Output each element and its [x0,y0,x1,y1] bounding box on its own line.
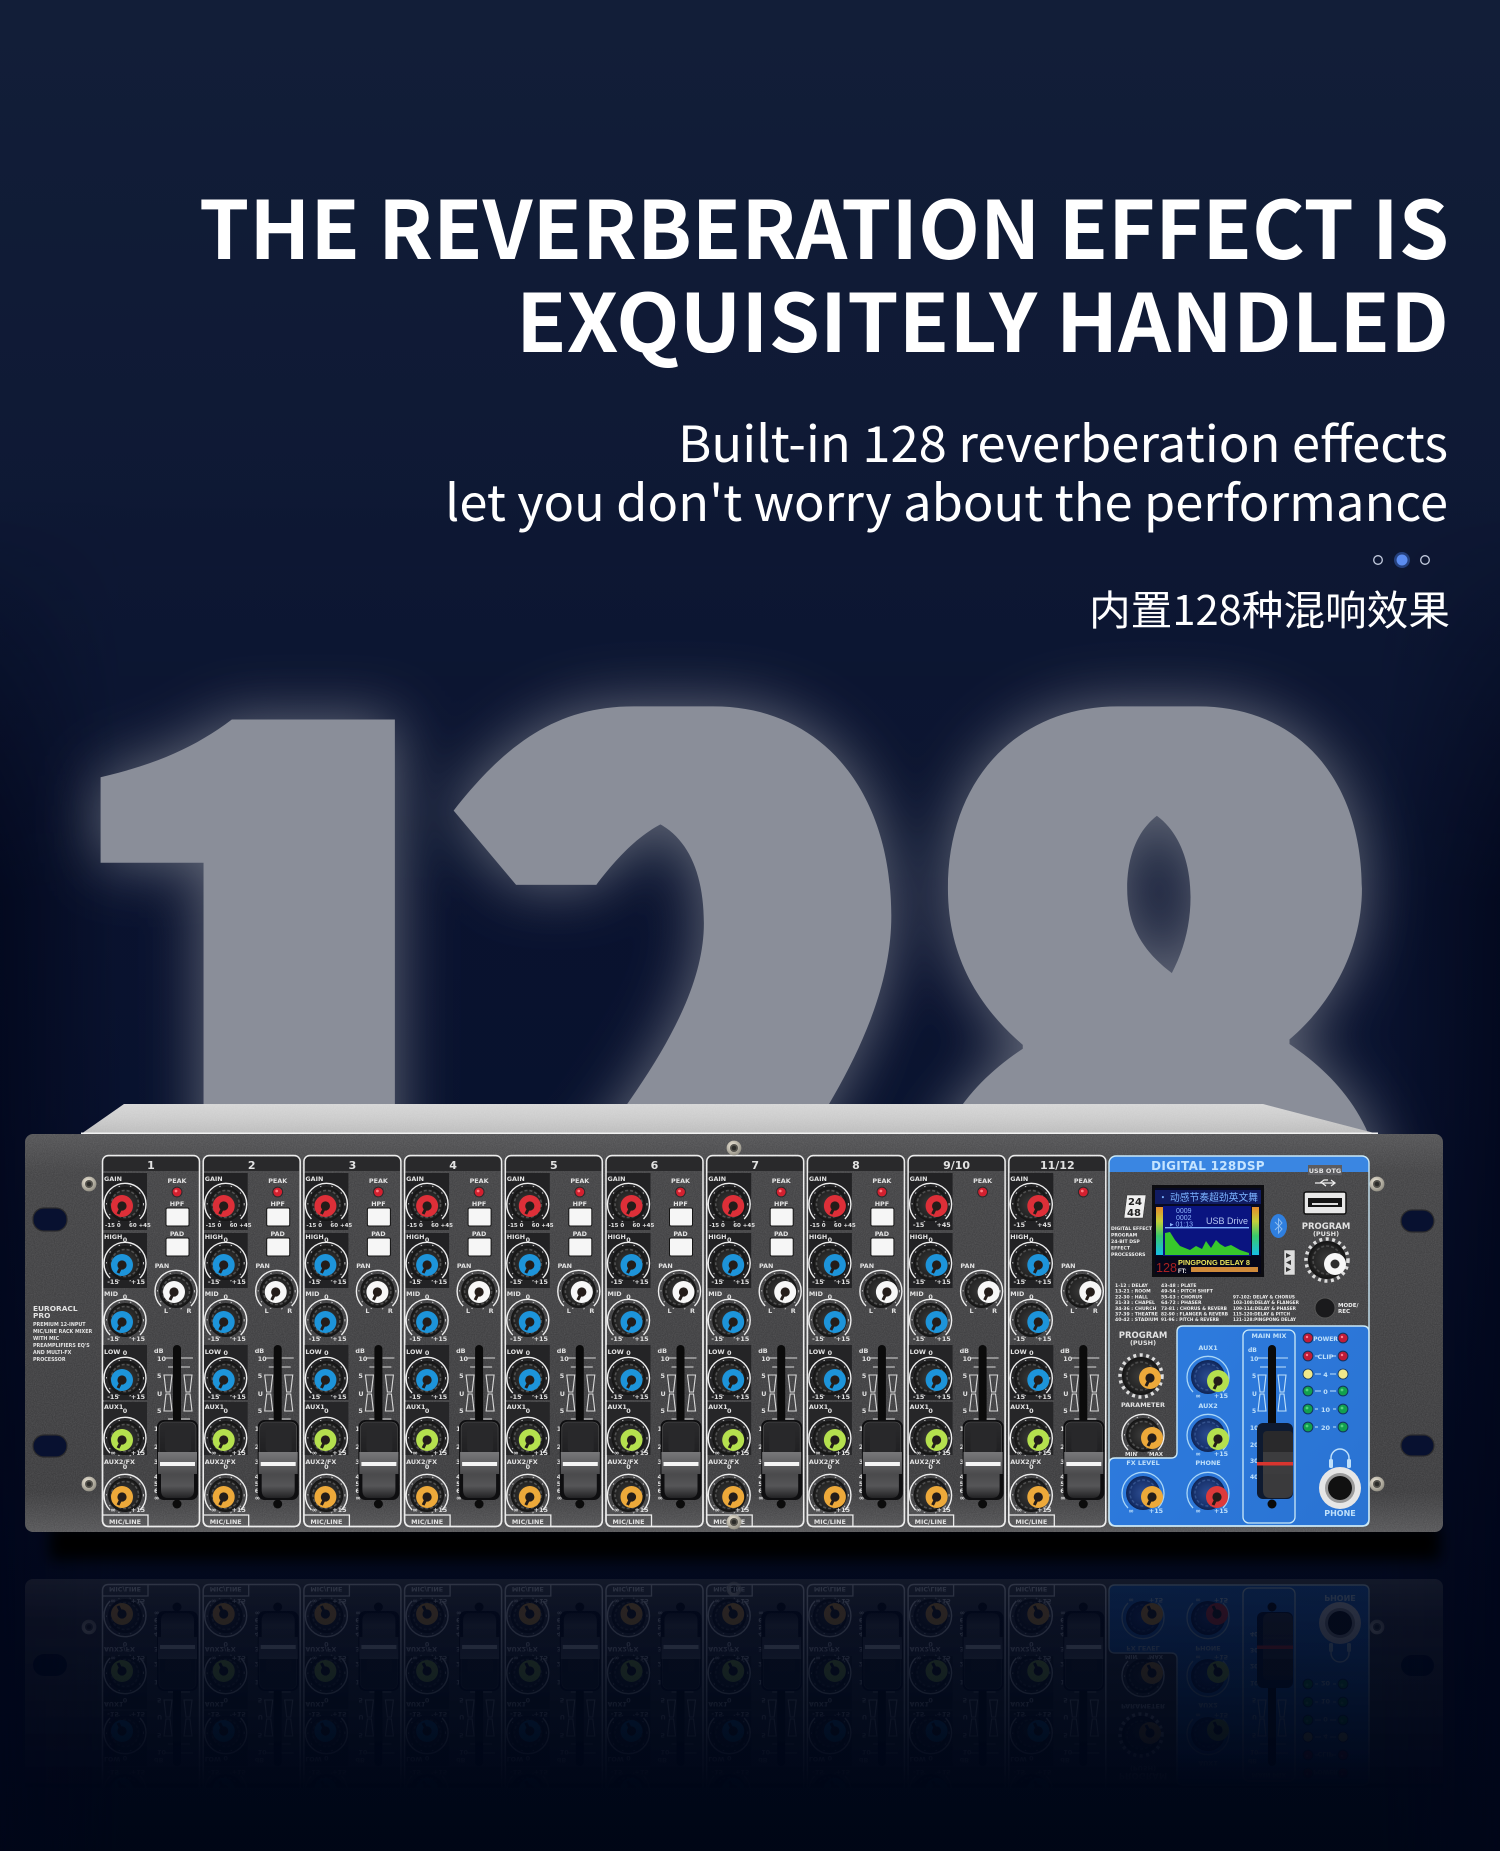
channel 2 [203,1156,300,1526]
transport buttons [1284,1250,1295,1275]
effects program list: 55-63 : CHORUS [1161,1294,1202,1300]
effects program list: 121-128:PINGPONG DELAY [1233,1317,1297,1323]
rack mixer unit [25,1134,1443,1532]
effects program list: 13-21 : ROOM [1115,1289,1151,1295]
LCD screen: FT: [1178,1269,1187,1275]
24/48 logo and description: 48 [1127,1208,1141,1219]
effects program list: 37-39 : THEATRE [1115,1312,1158,1318]
USB OTG port: USB OTG [1309,1167,1341,1175]
brand text: WITH MIC [33,1336,60,1342]
effects program list: 22-30 : HALL [1115,1294,1148,1300]
effects program list: 1-12 : DELAY [1115,1283,1149,1289]
channel 8: 8 [852,1159,860,1172]
channel 3: 3 [349,1159,356,1172]
panel: digital DSP section [1109,1156,1369,1526]
brand text: AND MULTI-FX [33,1350,72,1356]
panel: blue main mix section [1109,1326,1369,1526]
MODE/REC button: REC [1338,1309,1350,1315]
24/48 logo and description: 24-BIT DSP [1111,1239,1140,1245]
pagination dots [1374,552,1429,568]
PROGRAM knob [1302,1222,1350,1281]
channel 5: 5 [550,1159,558,1172]
channel 1 [102,1156,200,1526]
MODE/REC button [1315,1298,1359,1318]
subtitle: Built-in 128 reverberation effects [678,405,1448,477]
effects program list: 82-90 : FLANGER & REVERB [1161,1312,1228,1318]
channel 1: 1 [147,1159,155,1172]
effects program list: 91-96 : PITCH & REVERB [1161,1317,1219,1323]
effects program list [1115,1283,1299,1323]
channel 8 [807,1156,904,1526]
LCD screen [1152,1185,1264,1277]
LCD screen: ▸ 01:13 [1170,1222,1193,1228]
LCD screen: 128 [1156,1260,1177,1275]
channel 5 [505,1156,602,1526]
title [199,167,1449,376]
LCD screen: 0009 [1176,1208,1192,1215]
icon: bluetooth [1270,1214,1287,1238]
rack lid [81,1104,1378,1134]
brand text: PREMIUM 12-INPUT [33,1322,86,1328]
brand text: PROCESSOR [33,1357,66,1363]
effects program list: 109-114:DELAY & PHASER [1233,1306,1296,1312]
chinese caption: 内置128种混响效果 [1089,577,1450,637]
grey lower-left controls [1119,1331,1167,1458]
LCD screen: PINGPONG DELAY 8 [1178,1258,1250,1267]
channel 6 [606,1156,703,1526]
effects program list: 49-54 : PITCH SHIFT [1161,1289,1214,1295]
effects program list: 40-42 : STADIUM [1115,1317,1159,1323]
subtitle [445,405,1448,536]
reflection of the rack [25,1579,1443,1750]
24/48 logo and description [1111,1195,1153,1258]
channel 4 [405,1156,502,1526]
brand text: PRO [33,1311,50,1320]
subtitle: let you don't worry about the performance [445,464,1448,536]
24/48 logo and description: PROCESSORS [1111,1252,1145,1258]
channel 9/10 [908,1156,1005,1526]
channel 4: 4 [449,1159,457,1172]
PROGRAM knob: (PUSH) [1313,1230,1339,1238]
channel 11/12: 11/12 [1040,1159,1075,1172]
background [0,665,1500,1851]
24/48 logo and description: 24 [1128,1197,1142,1208]
title: THE REVERBERATION EFFECT IS [199,167,1449,283]
title: EXQUISITELY HANDLED [516,260,1449,376]
effects program list: 73-81 : CHORUS & REVERB [1161,1306,1227,1312]
24/48 logo and description: PROGRAM [1111,1232,1138,1238]
giant 128 numeral with glow [64,668,1407,1134]
effects program list: 115-120:DELAY & PITCH [1233,1312,1290,1318]
giant 128 numeral with glow: 2 [467,312,917,1658]
effects program list: 64-72 : PHASER [1161,1300,1202,1306]
channel 9/10: 9/10 [943,1159,970,1172]
brand text: EURORACL [33,1304,78,1313]
effects program list: 43-48 : PLATE [1161,1283,1196,1289]
channel 3 [304,1156,401,1526]
LCD screen: · 动感节奏超劲英文舞 [1158,1189,1258,1204]
rack shadow [50,1526,1440,1560]
screws [82,1141,1384,1529]
effects program list: 34-36 : CHURCH [1115,1306,1157,1312]
channel 6: 6 [651,1159,659,1172]
giant 128 numeral with glow: 1 [59,312,509,1658]
LCD screen: 0002 [1176,1215,1192,1222]
PROGRAM knob: PROGRAM [1302,1222,1350,1232]
effects program list: 103-108:DELAY & FLANGER [1233,1300,1299,1306]
brand text [33,1304,92,1363]
channel 7 [707,1156,804,1526]
channel 11/12 [1009,1156,1106,1526]
DSP header band [1109,1156,1369,1173]
USB OTG port [1304,1165,1346,1214]
DSP header band: DIGITAL 128DSP [1151,1159,1265,1173]
DSP section outline [1109,1156,1369,1526]
giant 128 numeral with glow: 8 [930,312,1380,1658]
effects program list: 97-102: DELAY & CHORUS [1233,1294,1295,1300]
24/48 logo and description: EFFECT [1111,1246,1131,1252]
LCD screen: USB Drive [1206,1216,1248,1227]
rack mounting holes [33,1208,1434,1457]
MODE/REC button: MODE/ [1338,1303,1359,1309]
effects program list: 31-33 : CHAPEL [1115,1300,1155,1306]
channel 2: 2 [248,1159,256,1172]
channel 7: 7 [751,1159,759,1172]
24/48 logo and description: DIGITAL EFFECT [1111,1226,1153,1232]
brand text: MIC/LINE RACK MIXER [33,1329,92,1335]
front panel [25,1134,1443,1532]
brand text: PREAMPLIFIERS EQ'S [33,1343,90,1349]
